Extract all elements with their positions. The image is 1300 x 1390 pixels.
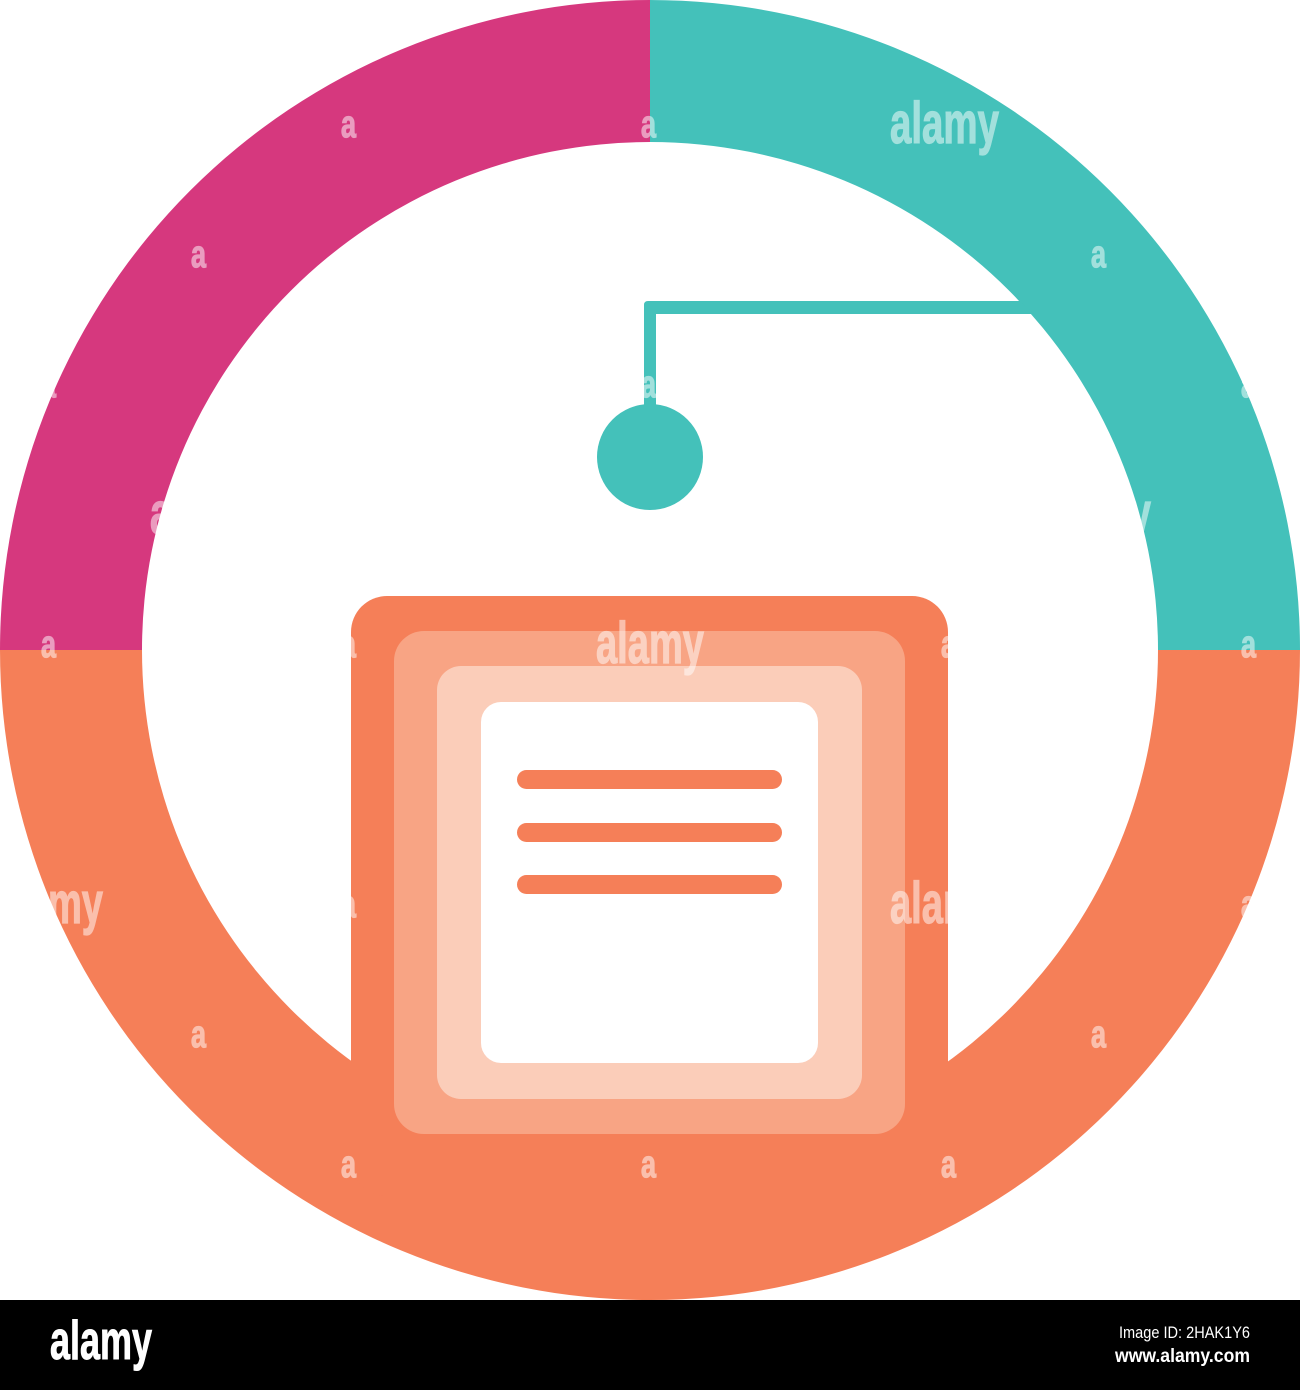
watermarks: a: [1091, 1014, 1107, 1056]
watermarks: a: [341, 624, 357, 666]
watermarks: a: [191, 234, 207, 276]
footer bar: [0, 1300, 1300, 1390]
connector: teal line and dot: [597, 301, 1034, 510]
watermarks: a: [1241, 884, 1257, 926]
watermarks: a: [191, 1014, 207, 1056]
watermarks: a: [1091, 234, 1107, 276]
watermarks: alamy: [150, 481, 258, 546]
document page: [481, 702, 818, 1063]
ring segment: teal top right: [650, 0, 1300, 650]
watermarks: a: [641, 104, 657, 146]
website: www.alamy.com: [1114, 1346, 1250, 1367]
watermarks: alamy: [890, 91, 999, 156]
watermarks: a: [941, 624, 957, 666]
ring segment: magenta top left: [0, 0, 650, 650]
watermarks: a: [341, 884, 357, 926]
watermarks: a: [1241, 624, 1257, 666]
watermarks: a: [941, 1144, 957, 1186]
watermarks: a: [1241, 364, 1257, 406]
watermarks: alamy: [596, 611, 704, 676]
footer logo: alamy: [50, 1309, 152, 1371]
watermarks: a: [41, 624, 57, 666]
ring segment: orange bottom half: [0, 650, 1300, 1300]
watermarks: a: [41, 364, 57, 406]
watermarks: a: [641, 364, 657, 406]
document inner frame: [437, 666, 862, 1099]
watermarks: a: [341, 104, 357, 146]
watermarks: alamy: [890, 871, 998, 936]
watermarks: a: [641, 1144, 657, 1186]
watermarks: alamy: [1043, 481, 1151, 546]
document middle frame: [394, 631, 905, 1134]
document text lines: [517, 770, 782, 894]
image id: Image ID: 2HAK1Y6: [1119, 1323, 1250, 1342]
watermarks: [0, 91, 1257, 1186]
watermarks: a: [341, 1144, 357, 1186]
document outer frame: [351, 596, 948, 1196]
document icon: [351, 596, 948, 1196]
